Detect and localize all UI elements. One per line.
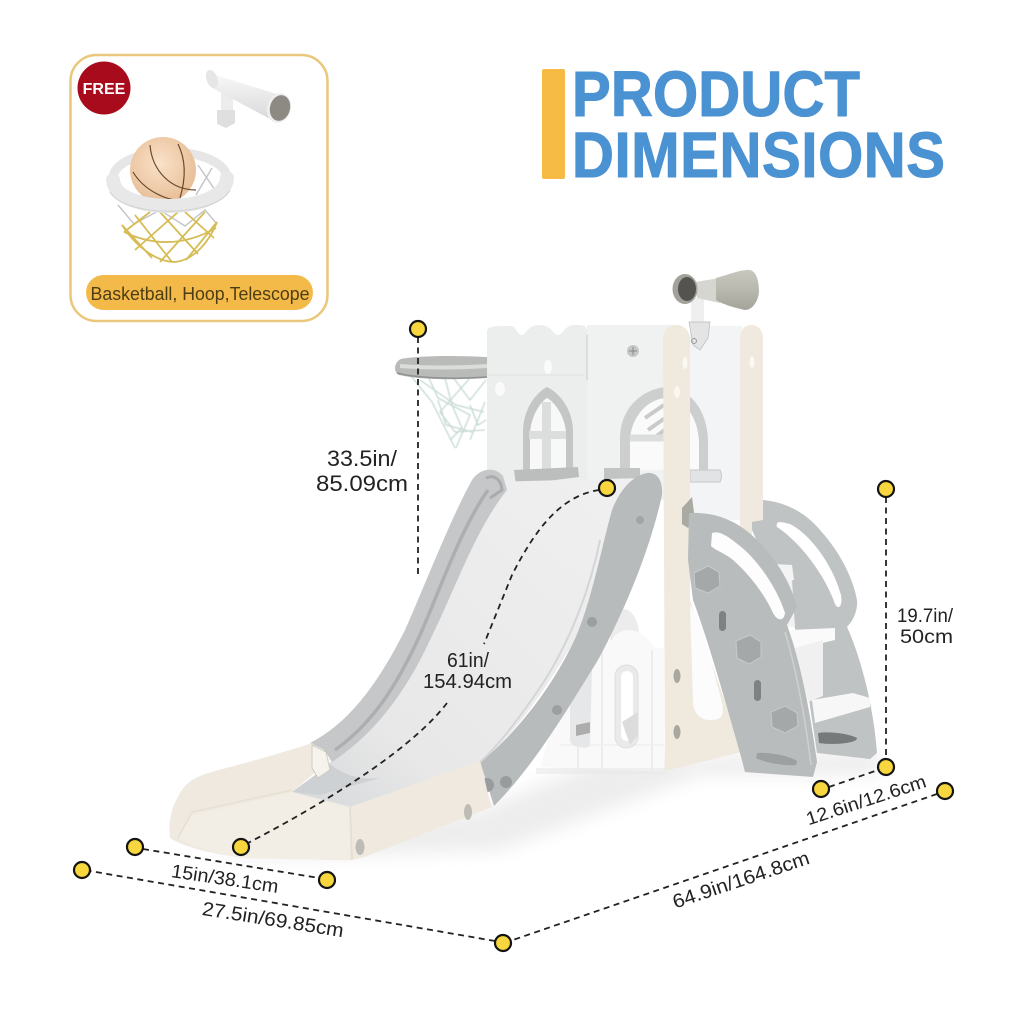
title <box>542 58 945 191</box>
title accent bar <box>542 69 565 179</box>
left cream post <box>663 325 754 771</box>
telescope on tower <box>672 270 759 350</box>
tower battlement panel with window <box>487 325 587 492</box>
left slide rail <box>310 470 507 762</box>
panel: free accessories <box>70 55 328 321</box>
label: tower height: 85.09cm <box>316 471 408 496</box>
label: tower height: 33.5in/ <box>327 446 398 471</box>
label: total length: 64.9in/164.8cm <box>670 847 812 913</box>
slide <box>169 470 662 860</box>
stair steps <box>737 562 870 723</box>
slide bed <box>292 478 645 807</box>
label pill: accessories <box>86 275 313 310</box>
icon: telescope accessory <box>204 68 294 128</box>
label: slide length: 61in/ <box>447 650 489 672</box>
label: total width: 27.5in/69.85cm <box>201 898 345 942</box>
right slide rail <box>480 473 662 806</box>
dimension lines <box>90 337 937 941</box>
window arch <box>523 387 573 473</box>
label: stair height: 19.7in/ <box>897 606 954 627</box>
back stair rail <box>752 500 877 759</box>
illustration: slide playset <box>169 270 877 860</box>
badge: FREE <box>78 62 130 114</box>
floor shadow <box>200 750 880 860</box>
label: slide width: 15in/38.1cm <box>170 861 280 898</box>
badge: FREE: FREE <box>83 81 126 98</box>
icon: basketball and hoop <box>110 137 230 262</box>
title line 2: DIMENSIONS <box>572 119 945 191</box>
dimension markers <box>74 321 953 951</box>
label: slide length: 154.94cm <box>423 671 512 693</box>
label: stair height: 50cm <box>900 627 953 648</box>
title line 1: PRODUCT <box>572 58 860 130</box>
label pill: accessories: Basketball, Hoop,Telescope <box>90 284 310 304</box>
right cream post <box>740 325 763 545</box>
tower center arch window <box>604 387 722 482</box>
tower back wall <box>587 325 742 520</box>
front stair panel <box>688 513 817 777</box>
label: stair width: 12.6in/12.6cm <box>803 771 929 829</box>
slide run-out in cream <box>169 743 492 860</box>
inner window opening in post area <box>690 605 723 720</box>
basketball hoop on tower <box>395 356 487 448</box>
bolts <box>694 566 720 593</box>
fence panels under tower <box>536 609 665 774</box>
